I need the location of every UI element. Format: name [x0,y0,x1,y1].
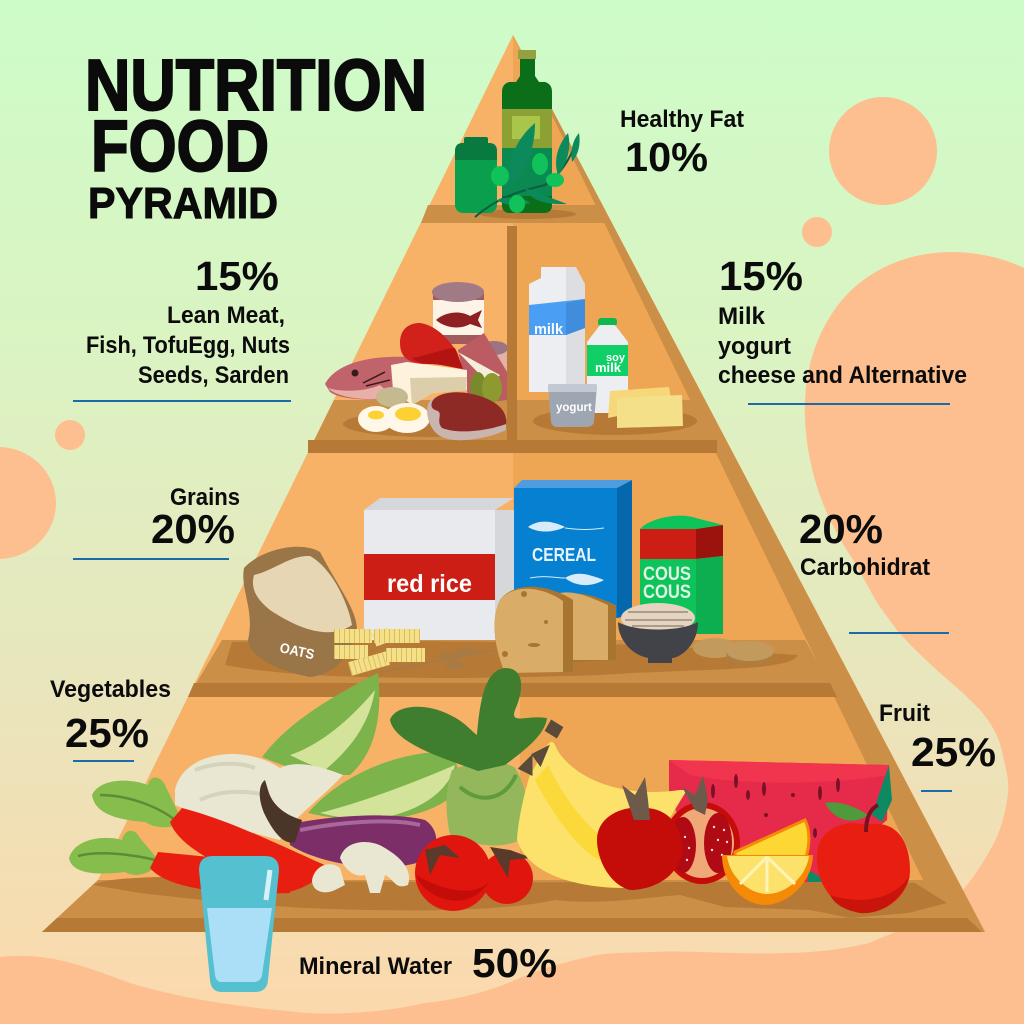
icon: small can [480,341,508,399]
title: FOOD [91,107,269,187]
shelf 4 [42,880,985,932]
icon: lettuce 2 [308,752,459,820]
shadows [93,209,947,918]
title: NUTRITION [85,46,427,126]
food: dairy [529,267,683,428]
icon: oats sack [243,547,357,677]
icon: couscous box [640,516,723,634]
title: PYRAMID [88,179,278,228]
icon: fish can [432,282,484,344]
icon: green jar [455,137,497,213]
icon: olive oil bottle [502,50,552,213]
label: milk: 15% [719,253,803,299]
label: grains: Grains [170,484,240,511]
label: lean meat: Lean Meat, [167,302,285,329]
icon: watermelon [669,760,892,882]
icon: couscous box: COUS [643,564,691,585]
label: fruit: Fruit [879,700,930,727]
icon: olives and nut [376,372,502,407]
icon: pomegranate half [664,802,740,884]
label: milk: cheese and Alternative [718,362,967,389]
label: healthy fat: 10% [625,134,708,180]
icon: bok choy [390,668,547,845]
icon: wheat [380,648,495,672]
icon: pasta [334,634,425,669]
icon: red rice box: red rice [387,570,472,598]
icon: chicken leg [400,323,463,369]
icon: yogurt cup: yogurt [556,402,592,414]
shelf 3 [188,640,837,697]
icon: carrot leaves [69,778,182,875]
icon: mushrooms [312,842,409,893]
icon: fish [325,357,440,400]
icon: olive branch [475,123,580,217]
label: carbohidrat: Carbohidrat [800,554,930,581]
icon: pomegranate crowns [622,775,708,820]
shelf 1 [421,205,609,223]
icon: water glass [199,856,279,992]
label: lean meat: 15% [195,253,279,299]
icon: cheese [608,387,683,428]
icon: steak [427,392,506,440]
title [85,46,427,228]
label: carbohidrat [799,506,949,634]
icon: eggs [358,403,430,433]
icon: bananas [517,723,687,888]
shelf 2 [308,226,717,453]
icon: couscous box: COUS [643,582,691,603]
label: milk [718,253,967,405]
icon: red rice box [364,498,515,640]
label: vegetables: 25% [65,710,149,756]
label: fruit [879,700,996,792]
label: lean meat: Seeds, Sarden [138,362,289,389]
icon: cereal box: CEREAL [532,545,596,565]
icon: eggplant [260,780,436,867]
label: mineral water: 50% [472,940,557,986]
label: grains: 20% [151,506,235,552]
icon: tomatoes [415,835,533,911]
icon: tofu [391,362,467,405]
icon: pink meat [458,333,507,405]
label: lean meat [73,253,291,402]
icon: soy milk bottle [587,318,628,413]
icon: carrots [150,808,327,894]
food: fruit [517,723,910,913]
icon: lettuce [262,673,379,775]
icon: pomegranate [597,807,682,890]
food: healthy fat [455,50,580,217]
label: vegetables [50,676,171,762]
label: healthy fat [620,106,744,180]
icon: yogurt cup [548,384,597,427]
icon: orange slices [722,820,813,905]
food: protein [325,282,508,440]
icon: milk carton [529,267,585,392]
label: healthy fat: Healthy Fat [620,106,744,133]
icon: cabbage [175,754,343,840]
label: milk: Milk [718,303,766,330]
icon: milk carton: milk [534,321,564,338]
label: mineral water: Mineral Water [299,953,452,980]
food: vegetables [69,668,547,911]
icon: soy milk bottle: soy [606,352,626,364]
icon: soy milk bottle: milk [595,360,622,375]
label: vegetables: Vegetables [50,676,171,703]
label: grains [73,484,240,560]
label: fruit: 25% [911,729,996,775]
label: carbohidrat: 20% [799,506,883,552]
label: milk: yogurt [718,333,791,360]
icon: noodle bowl [618,603,698,663]
label: mineral water [299,940,557,986]
icon: bread [495,587,616,673]
icon: apple [817,802,910,913]
icon: cookies [693,638,774,664]
label: lean meat: Fish, TofuEgg, Nuts [86,332,290,359]
icon: oats sack: OATS [278,639,316,662]
food: grains [243,480,774,677]
icon: cereal box [514,480,632,618]
